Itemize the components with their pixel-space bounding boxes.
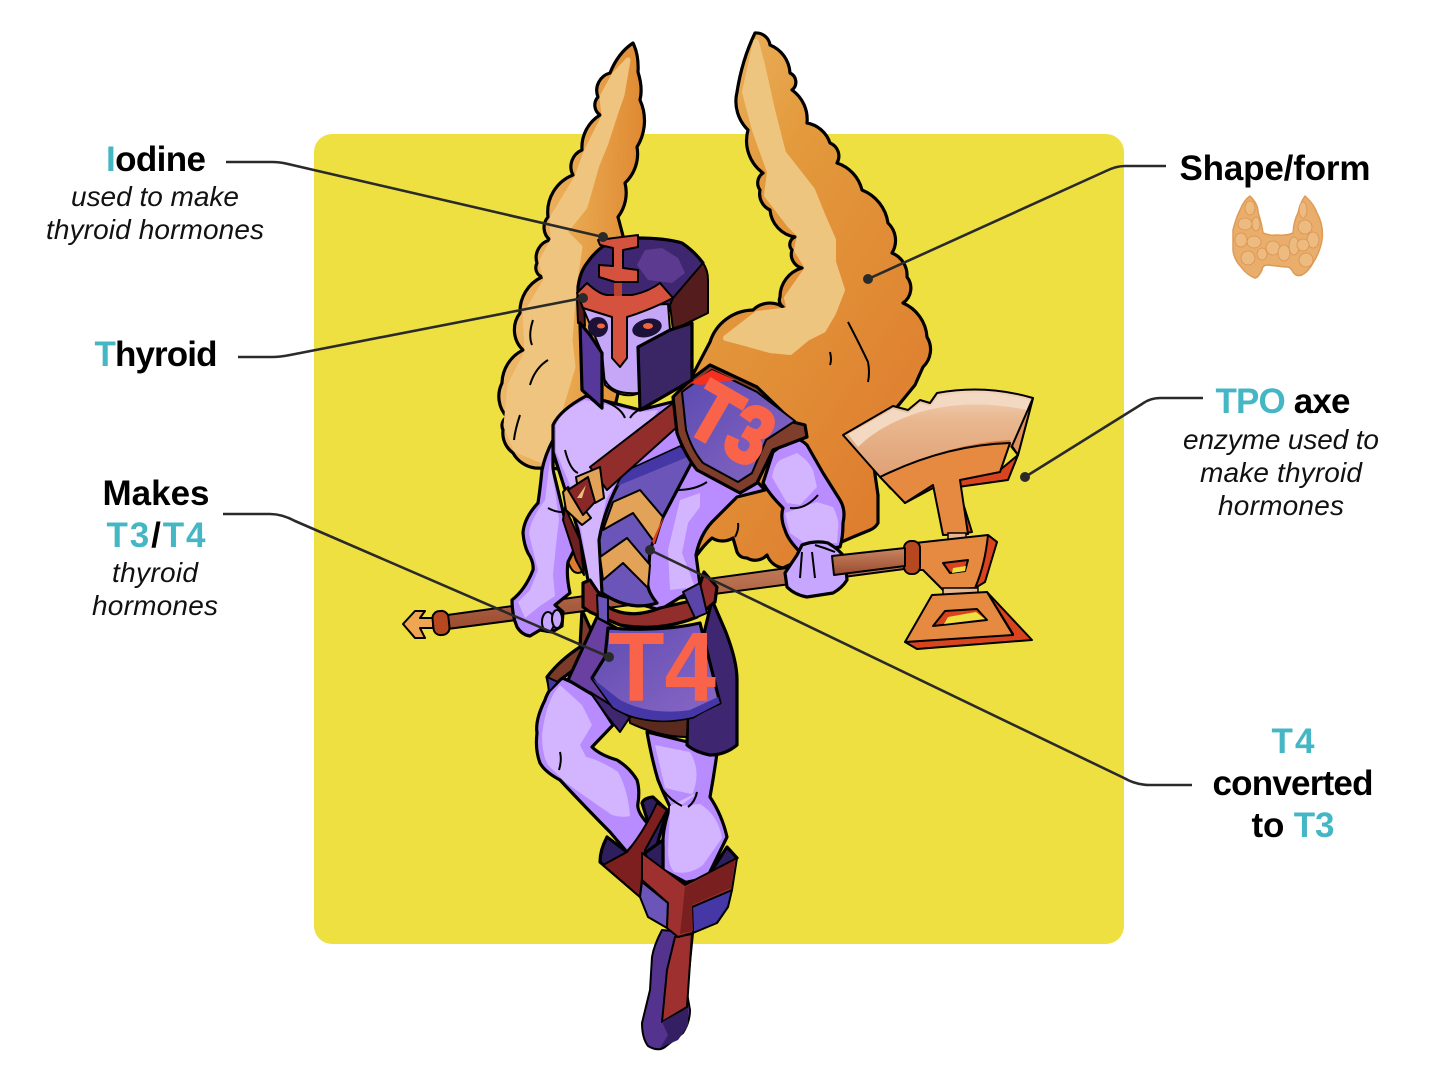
right thyroid wing (567, 33, 931, 573)
T3 emblem: T3 (673, 365, 790, 485)
label: Thyroid: Thyroid (94, 335, 218, 374)
skirt panel with T4 (592, 612, 720, 722)
leader line: T4 converted to T3 (645, 545, 1192, 785)
leader line: Thyroid (238, 293, 588, 357)
helmet face opening (583, 304, 670, 395)
label: Makes T3/T4: hormones (92, 590, 218, 621)
leader line: Iodine (226, 162, 608, 242)
yellow background panel (314, 134, 1124, 944)
label: Shape/form: Shape/form (1180, 149, 1370, 188)
label: Iodine (46, 140, 264, 245)
back boot red cuff (603, 803, 667, 897)
leader line: Makes T3/T4 (223, 514, 614, 662)
shoulder pad with T3 (673, 365, 807, 493)
crest letter I (598, 235, 638, 282)
belt (583, 572, 717, 627)
back skirt and capes (547, 600, 737, 755)
spear haft and arrow tip (403, 551, 912, 638)
left arm (512, 440, 578, 636)
T4 emblem: T4 (608, 612, 716, 722)
leader line: Shape/form (863, 166, 1166, 284)
helmet cheek guards (580, 323, 602, 408)
warrior illustration (403, 33, 1033, 1049)
sash with chevrons (599, 447, 693, 606)
torso (553, 396, 765, 610)
right arm (763, 437, 844, 552)
label: Iodine: used to make (71, 181, 239, 212)
axe upper head (895, 455, 1018, 534)
front boot (640, 840, 737, 1049)
label: T4 converted to T3: to T3 (1252, 806, 1334, 845)
label: Makes T3/T4 (92, 474, 218, 621)
boot shin and foot (642, 930, 693, 1049)
axe base (905, 592, 1032, 649)
axe lower head (912, 535, 997, 590)
TPO axe (843, 389, 1033, 649)
helmet dome (578, 238, 703, 315)
label: T4 converted to T3: converted (1212, 764, 1374, 803)
label: TPO axe: TPO axe (1216, 382, 1350, 421)
label: Makes T3/T4: thyroid (112, 557, 199, 588)
red shoulder strap with buckle (563, 403, 677, 575)
front leg (647, 732, 727, 883)
icon: thyroid gland (1233, 196, 1322, 278)
left thyroid wing (499, 43, 644, 470)
axe blade (843, 389, 1033, 477)
label: TPO axe: hormones (1218, 490, 1344, 521)
chest shadow line (565, 398, 707, 490)
label: TPO axe: make thyroid (1200, 457, 1363, 488)
right hand gripping haft (785, 542, 905, 597)
helmet red visor (577, 283, 673, 367)
label: Makes T3/T4: T3/T4 (106, 516, 206, 555)
back leg (536, 677, 650, 852)
helmet brim band (670, 263, 708, 330)
label: T4 converted to T3 (1212, 722, 1374, 845)
label: TPO axe (1183, 382, 1379, 521)
label: TPO axe: enzyme used to (1183, 424, 1379, 455)
label: Iodine: Iodine (106, 140, 206, 179)
back boot opening (600, 797, 667, 898)
label: T4 converted to T3: T4 (1272, 722, 1315, 761)
label: Makes T3/T4: Makes (102, 474, 210, 513)
helmet (577, 235, 708, 410)
leader line: TPO axe (1020, 398, 1203, 482)
label: Iodine: thyroid hormones (46, 214, 264, 245)
